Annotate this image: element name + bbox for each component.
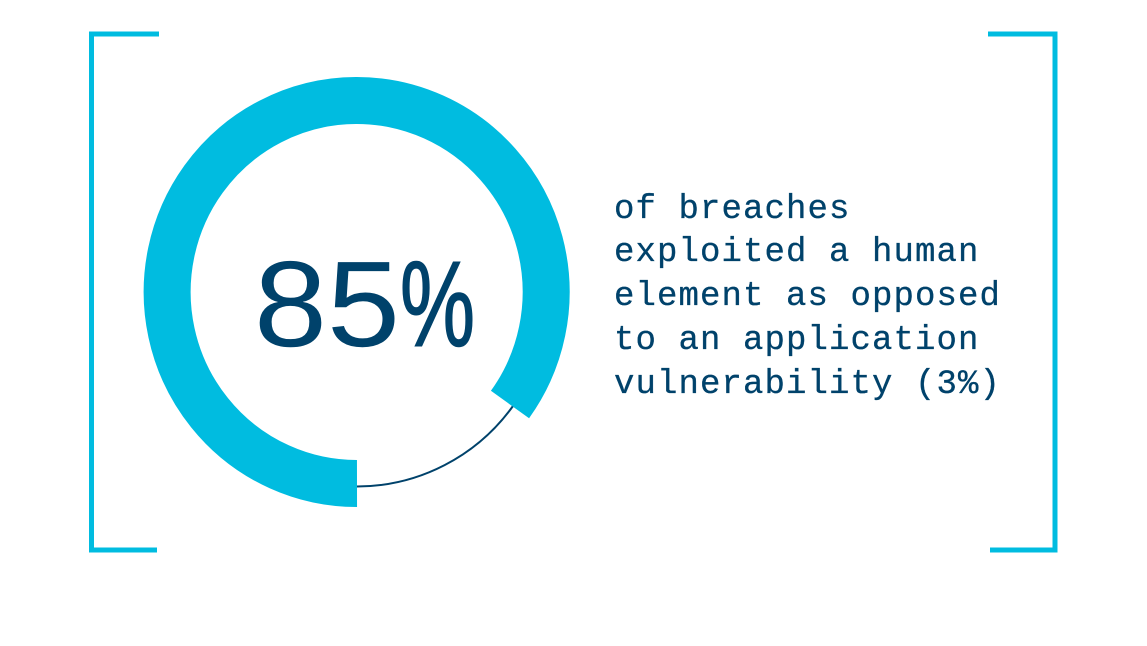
donut remainder thin arc [357,406,513,486]
donut 85% arc [167,101,546,484]
right bracket [988,34,1055,550]
description text: element as opposed [614,278,1001,316]
description text: vulnerability (3%) [614,366,1001,404]
big number [254,236,475,372]
left bracket [92,34,159,550]
description text: to an application [614,322,980,360]
description text: exploited a human [614,234,980,272]
description text [614,191,1001,404]
big number: % [400,236,475,372]
big number: 85 [254,236,400,372]
description text: of breaches [614,191,851,229]
